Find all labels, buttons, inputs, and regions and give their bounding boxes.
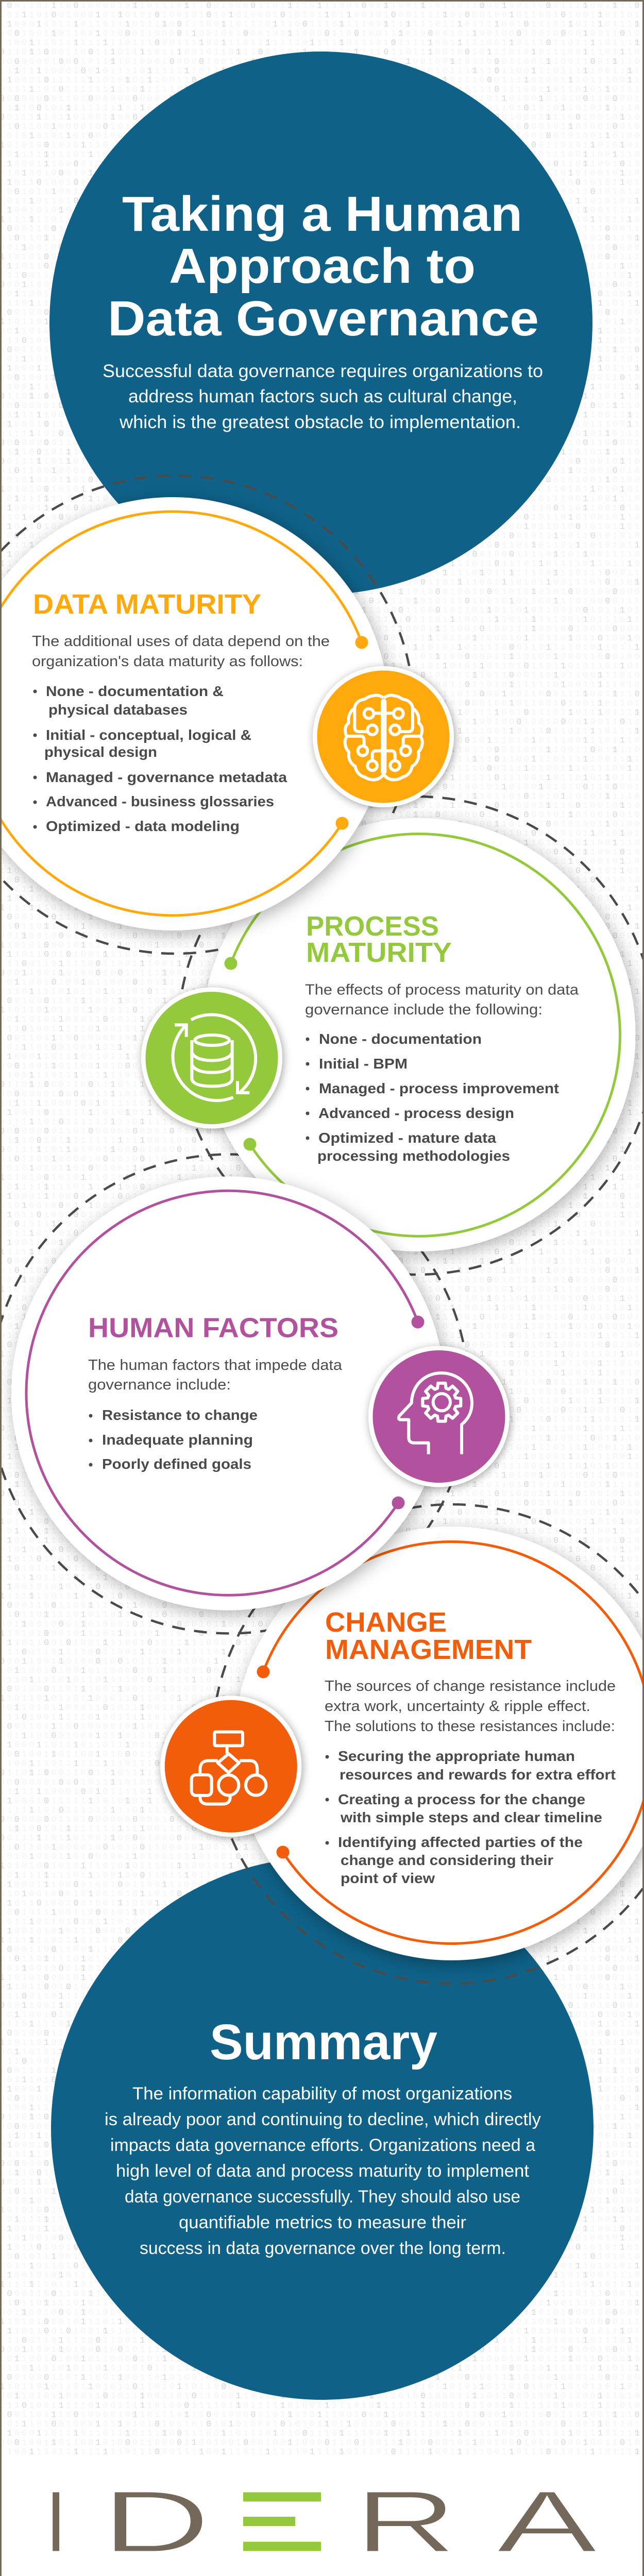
text: data maturity intro bbox=[32, 633, 330, 670]
list: process levels: processing methodologies bbox=[317, 1148, 510, 1164]
list: process levels: Managed - process improvement bbox=[319, 1080, 559, 1096]
text: data maturity intro: The additional uses of data depend on the bbox=[32, 633, 330, 650]
connector: dashed ring around change management bbox=[212, 1504, 644, 1984]
list: data maturity levels: physical databases bbox=[48, 702, 188, 718]
connector: dashed ring around data maturity bbox=[0, 476, 414, 954]
list: data maturity levels: Initial - conceptual, logical & bbox=[46, 727, 251, 743]
heading: human factors: HUMAN FACTORS bbox=[88, 1313, 338, 1344]
text: summary body: high level of data and process maturity to implement bbox=[116, 2161, 530, 2181]
icon: head with gear bbox=[368, 1346, 510, 1487]
panel: change management bbox=[234, 1527, 644, 1960]
text: summary body: success in data governance over the long term. bbox=[140, 2239, 506, 2258]
text: change management intro bbox=[325, 1678, 616, 1735]
logo: IDERA bbox=[44, 2473, 598, 2571]
list: process levels: Advanced - process design bbox=[318, 1105, 514, 1121]
heading: process maturity: MATURITY bbox=[306, 937, 452, 968]
connector: dashed ring around human factors bbox=[0, 1154, 469, 1633]
heading: change management: MANAGEMENT bbox=[325, 1634, 532, 1665]
icon: brain circuit bbox=[313, 666, 454, 807]
text: introduction bbox=[103, 361, 543, 432]
heading: change management: CHANGE bbox=[325, 1607, 447, 1638]
list: human factors: Inadequate planning bbox=[102, 1432, 253, 1448]
heading: change management bbox=[325, 1607, 532, 1665]
text: summary body: impacts data governance efforts. Organizations need a bbox=[110, 2136, 535, 2155]
list: change solutions: change and considering their bbox=[341, 1852, 553, 1868]
panel: human factors bbox=[11, 1177, 445, 1611]
text: human factors intro: governance include: bbox=[88, 1377, 231, 1393]
list: change solutions: Creating a process for the change bbox=[338, 1791, 585, 1807]
text: change management intro: The sources of change resistance include bbox=[325, 1678, 616, 1694]
list: change solutions bbox=[326, 1748, 616, 1886]
logo: IDERA: D bbox=[101, 2473, 211, 2571]
text: summary body: data governance successfully. They should also use bbox=[125, 2187, 520, 2207]
heading: process maturity bbox=[306, 911, 452, 968]
text: process intro bbox=[305, 982, 579, 1018]
logo: IDERA: A bbox=[496, 2473, 598, 2571]
title: Data Governance bbox=[108, 291, 539, 346]
heading: summary: Summary bbox=[210, 2014, 437, 2070]
list: process levels: None - documentation bbox=[319, 1031, 482, 1047]
title: Approach to bbox=[169, 239, 476, 294]
list: data maturity levels bbox=[33, 683, 287, 834]
text: summary body bbox=[105, 2084, 541, 2258]
list: human factors: Resistance to change bbox=[102, 1407, 258, 1423]
panel: title circle bbox=[49, 52, 592, 595]
list: process levels: Optimized - mature data bbox=[318, 1130, 496, 1146]
text: summary body: The information capability of most organizations bbox=[132, 2084, 512, 2104]
list: human factors: Poorly defined goals bbox=[102, 1456, 251, 1472]
list: change solutions: Identifying affected parties of the bbox=[338, 1834, 583, 1850]
panel: process maturity bbox=[202, 818, 636, 1251]
panel: summary circle bbox=[51, 1857, 594, 2400]
text: human factors intro: The human factors that impede data bbox=[88, 1357, 343, 1374]
text: introduction: address human factors such as cultural change, bbox=[128, 386, 517, 406]
text: change management intro: The solutions to these resistances include: bbox=[325, 1718, 615, 1735]
list: data maturity levels: Advanced - business glossaries bbox=[46, 793, 274, 809]
list: change solutions: point of view bbox=[341, 1870, 435, 1886]
text: introduction: Successful data governance requires organizations to bbox=[103, 361, 543, 381]
heading: process maturity: PROCESS bbox=[306, 911, 439, 942]
list: change solutions: Securing the appropriate human bbox=[338, 1748, 575, 1764]
text: introduction: which is the greatest obstacle to implementation. bbox=[119, 412, 521, 432]
text: data maturity intro: organization's data maturity as follows: bbox=[32, 653, 303, 670]
icon: database refresh bbox=[141, 987, 282, 1128]
list: human factors bbox=[89, 1407, 258, 1472]
text: human factors intro bbox=[88, 1357, 343, 1393]
title: Taking a Human bbox=[122, 187, 522, 242]
list: data maturity levels: physical design bbox=[44, 744, 157, 760]
panel: data maturity bbox=[0, 497, 389, 930]
list: data maturity levels: None - documentation & bbox=[46, 683, 224, 699]
list: data maturity levels: Optimized - data modeling bbox=[46, 818, 240, 834]
text: change management intro: extra work, uncertainty & ripple effect. bbox=[325, 1698, 590, 1715]
text: process intro: governance include the following: bbox=[305, 1002, 543, 1018]
logo: IDERA: R bbox=[354, 2473, 457, 2571]
list: data maturity levels: Managed - governance metadata bbox=[46, 769, 287, 785]
title bbox=[108, 187, 539, 346]
text: summary body: is already poor and continuing to decline, which directly bbox=[105, 2110, 541, 2129]
logo: IDERA: I bbox=[44, 2473, 68, 2571]
icon: flowchart bbox=[160, 1696, 301, 1837]
connector: dashed ring around process maturity bbox=[178, 796, 644, 1275]
list: process levels bbox=[306, 1031, 559, 1164]
list: change solutions: with simple steps and clear timeline bbox=[340, 1809, 602, 1825]
text: summary body: quantifiable metrics to measure their bbox=[179, 2213, 466, 2232]
heading: data maturity: DATA MATURITY bbox=[33, 589, 261, 620]
list: change solutions: resources and rewards for extra effort bbox=[340, 1767, 616, 1783]
text: process intro: The effects of process maturity on data bbox=[305, 982, 579, 998]
list: process levels: Initial - BPM bbox=[319, 1056, 408, 1072]
